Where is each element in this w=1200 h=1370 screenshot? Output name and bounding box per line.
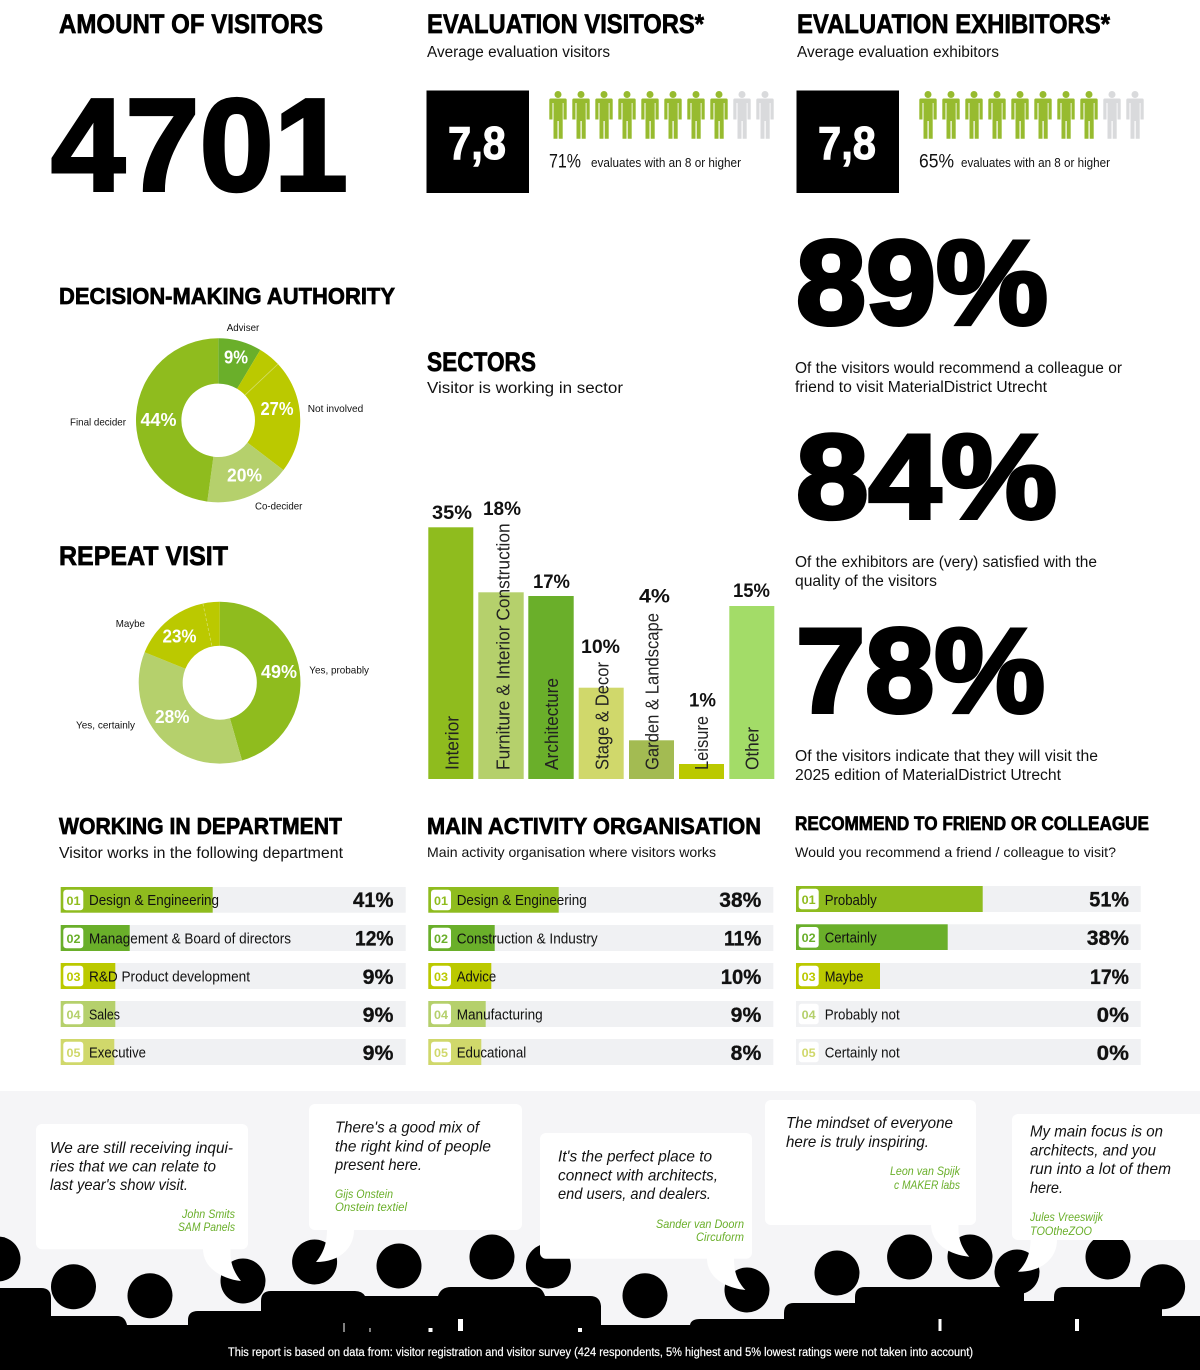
icon row: people rating visitors bbox=[549, 91, 774, 139]
stat: 65 percent of exhibitors: evaluates with an 8 or higher bbox=[961, 156, 1110, 170]
row: probably not: 0% bbox=[1097, 1004, 1129, 1027]
row: certainly not bbox=[796, 1039, 1141, 1065]
row: management: Management & Board of directors bbox=[89, 930, 291, 947]
bar chart: sectors: 1% bbox=[689, 690, 716, 712]
donut chart: decision-making authority bbox=[136, 338, 300, 502]
speech bubble: Sander van Doorn: Circuform bbox=[696, 1230, 744, 1244]
row: executive: Executive bbox=[89, 1045, 146, 1062]
speech bubble: Gijs Onstein: the right kind of people bbox=[335, 1138, 491, 1156]
labels: repeat visit categories: Yes, probably bbox=[309, 664, 370, 676]
stat: 89 percent recommend: friend to visit MaterialDistrict Utrecht bbox=[795, 379, 1048, 396]
row: educational: Educational bbox=[457, 1045, 526, 1062]
donut chart: decision-making authority: 9% bbox=[224, 348, 248, 368]
stat: 84 percent satisfied: Of the exhibitors are (very) satisfied with the bbox=[795, 554, 1097, 571]
row: design and engineering: Design & Engineering bbox=[457, 892, 587, 909]
speech bubble: Leon van Spijk: c MAKER labs bbox=[894, 1178, 960, 1192]
donut chart: decision-making authority: 44% bbox=[140, 410, 176, 430]
row: sales: 04 bbox=[66, 1008, 81, 1022]
stat: 89 percent recommend: 89% bbox=[796, 216, 1048, 350]
row: certainly not: Certainly not bbox=[825, 1045, 900, 1062]
labels: repeat visit categories bbox=[76, 618, 370, 732]
speech bubble: John Smits: John Smits bbox=[181, 1207, 235, 1221]
stat: 78 percent will visit 2025: 78% bbox=[796, 604, 1045, 738]
panel: recommend to friend or colleague bbox=[795, 814, 1149, 1065]
bar chart: sectors: Stage & Decor bbox=[593, 662, 613, 770]
speech bubble: Leon van Spijk: here is truly inspiring. bbox=[786, 1134, 929, 1151]
panel: amount of visitors bbox=[51, 9, 348, 218]
subtitle: average evaluation visitors: Average evaluation visitors bbox=[427, 44, 610, 61]
row: sales bbox=[61, 1001, 406, 1027]
heading: sectors: SECTORS bbox=[427, 347, 536, 377]
labels: repeat visit categories: Maybe bbox=[116, 618, 145, 630]
icon row: people rating exhibitors bbox=[919, 91, 1144, 139]
stat: 89 percent recommend bbox=[795, 216, 1122, 396]
stat: 71 percent of visitors: evaluates with an 8 or higher bbox=[591, 156, 741, 170]
speech bubble: Gijs Onstein bbox=[309, 1104, 522, 1262]
panel: decision-making authority bbox=[59, 283, 395, 512]
stat: 65 percent of exhibitors: 65% bbox=[919, 152, 954, 172]
row: probably not: 04 bbox=[802, 1008, 816, 1022]
donut chart: repeat visit: 28% bbox=[155, 707, 190, 727]
row: design and engineering: 41% bbox=[353, 889, 394, 912]
speech bubble: Sander van Doorn: end users, and dealers. bbox=[558, 1186, 711, 1203]
row: probably not: Probably not bbox=[825, 1006, 900, 1023]
stat: 84 percent satisfied: 84% bbox=[796, 410, 1057, 544]
heading: repeat visit: REPEAT VISIT bbox=[59, 541, 228, 571]
row: R and D: 03 bbox=[66, 970, 81, 984]
speech bubble: Jules Vreeswijk: here. bbox=[1030, 1180, 1063, 1197]
labels: decision-making categories bbox=[70, 322, 363, 512]
labels: repeat visit categories: Yes, certainly bbox=[76, 720, 136, 732]
speech bubble: John Smits: ries that we can relate to bbox=[50, 1158, 216, 1176]
stat: 84 percent satisfied: quality of the visitors bbox=[795, 573, 937, 590]
panel: main activity organisation bbox=[427, 813, 773, 1065]
row: management: 02 bbox=[66, 932, 81, 946]
speech bubble: Jules Vreeswijk: My main focus is on bbox=[1030, 1124, 1163, 1140]
stat: 78 percent will visit 2025: Of the visitors indicate that they will visit the bbox=[795, 748, 1098, 765]
bar chart: sectors: 17% bbox=[533, 572, 570, 593]
row: probably: 51% bbox=[1089, 888, 1129, 912]
bar chart: sectors bbox=[428, 499, 774, 779]
speech bubble: Leon van Spijk: Leon van Spijk bbox=[890, 1164, 961, 1178]
labels: decision-making categories: Adviser bbox=[227, 322, 260, 334]
row: executive bbox=[61, 1039, 406, 1065]
stat: 78 percent will visit 2025: 2025 edition of MaterialDistrict Utrecht bbox=[795, 767, 1062, 784]
bar chart: sectors: 18% bbox=[483, 499, 521, 520]
row: executive: 9% bbox=[363, 1042, 394, 1065]
heading: evaluation visitors: EVALUATION VISITORS* bbox=[427, 9, 704, 39]
speech bubble: Leon van Spijk bbox=[765, 1100, 976, 1257]
row: design and engineering bbox=[428, 887, 773, 913]
row: educational: 8% bbox=[731, 1042, 762, 1065]
panel: testimonials band bbox=[0, 1091, 1200, 1370]
donut chart: decision-making authority: 20% bbox=[227, 466, 262, 486]
row: management bbox=[61, 925, 406, 951]
row: advice bbox=[428, 963, 773, 989]
stat: 65 percent of exhibitors bbox=[919, 152, 1110, 172]
subtitle: department: Visitor works in the following department bbox=[59, 845, 344, 862]
row: certainly: 38% bbox=[1087, 927, 1129, 950]
stat: 89 percent recommend: Of the visitors would recommend a colleague or bbox=[795, 360, 1122, 377]
row: certainly not: 0% bbox=[1097, 1042, 1129, 1065]
footer note: This report is based on data from: visitor registration and visitor survey (424 respondents, 5% highest and 5% lowest ratings were not taken into account) bbox=[228, 1347, 973, 1359]
labels: decision-making categories: Final decider bbox=[70, 416, 126, 428]
row: design and engineering: Design & Engineering bbox=[89, 892, 219, 909]
speech bubble: John Smits: SAM Panels bbox=[178, 1220, 235, 1234]
row: construction and industry: 02 bbox=[434, 932, 448, 946]
stat: 71 percent of visitors: 71% bbox=[549, 152, 581, 172]
row: advice: 10% bbox=[721, 966, 762, 989]
bar chart: sectors: 4% bbox=[639, 586, 670, 608]
row: advice: Advice bbox=[457, 969, 496, 986]
score box: exhibitors 7,8: 7,8 bbox=[818, 117, 876, 169]
row: maybe: Maybe bbox=[825, 968, 863, 986]
speech bubble: Gijs Onstein: Onstein textiel bbox=[335, 1200, 407, 1214]
donut chart: repeat visit bbox=[139, 602, 300, 764]
heading: evaluation exhibitors: EVALUATION EXHIBITORS* bbox=[797, 9, 1110, 39]
heading: decision-making authority: DECISION-MAKING AUTHORITY bbox=[59, 283, 395, 309]
row: R and D: 9% bbox=[363, 966, 394, 989]
heading: working in department: WORKING IN DEPARTMENT bbox=[59, 813, 342, 839]
donut chart: decision-making authority: 27% bbox=[260, 399, 294, 419]
labels: decision-making categories: Co-decider bbox=[255, 500, 303, 512]
panel: working in department bbox=[59, 813, 406, 1065]
speech bubble: Leon van Spijk: The mindset of everyone bbox=[786, 1115, 953, 1132]
heading: amount of visitors: AMOUNT OF VISITORS bbox=[59, 9, 323, 39]
row: certainly bbox=[796, 924, 1141, 950]
speech bubble: Gijs Onstein: There's a good mix of bbox=[335, 1120, 480, 1136]
panel: sectors bbox=[427, 347, 774, 779]
row: manufacturing bbox=[428, 1001, 773, 1027]
row: construction and industry: Construction & Industry bbox=[457, 930, 598, 947]
heading: main activity organisation: MAIN ACTIVITY ORGANISATION bbox=[427, 813, 761, 839]
score box: exhibitors 7,8 bbox=[796, 90, 899, 193]
stat: 84 percent satisfied bbox=[795, 410, 1097, 590]
subtitle: main activity: Main activity organisation where visitors works bbox=[427, 844, 716, 860]
row: probably bbox=[796, 886, 1141, 912]
subtitle: visitor sector: Visitor is working in sector bbox=[427, 380, 623, 397]
row: maybe: 03 bbox=[802, 970, 816, 984]
bar chart: sectors: Furniture & Interior Construction bbox=[493, 523, 513, 770]
speech bubble: John Smits: last year's show visit. bbox=[50, 1177, 188, 1194]
stat: 71 percent of visitors bbox=[549, 152, 741, 172]
row: educational: 05 bbox=[434, 1046, 448, 1060]
subtitle: average evaluation exhibitors: Average evaluation exhibitors bbox=[797, 44, 999, 61]
heading: recommend to friend or colleague: RECOMMEND TO FRIEND OR COLLEAGUE bbox=[795, 814, 1149, 835]
bar chart: sectors: 35% bbox=[432, 503, 472, 524]
bar chart: sectors: Garden & Landscape bbox=[643, 613, 663, 770]
row: sales: 9% bbox=[363, 1004, 394, 1027]
row: certainly: Certainly bbox=[825, 930, 877, 946]
row: executive: 05 bbox=[66, 1046, 81, 1060]
row: construction and industry bbox=[428, 925, 773, 951]
row: R and D bbox=[61, 963, 406, 989]
stat: 78 percent will visit 2025 bbox=[795, 604, 1098, 784]
row: advice: 03 bbox=[434, 970, 448, 984]
speech bubble: Gijs Onstein: Gijs Onstein bbox=[335, 1187, 393, 1201]
bar chart: sectors: Other bbox=[743, 727, 763, 770]
bar chart: sectors: 15% bbox=[733, 581, 770, 602]
row: probably not bbox=[796, 1001, 1141, 1027]
bar chart: sectors: Architecture bbox=[542, 678, 562, 770]
speech bubble: Sander van Doorn: Sander van Doorn bbox=[656, 1217, 744, 1231]
row: R and D: R&D Product development bbox=[89, 969, 251, 986]
speech bubble: John Smits: We are still receiving inqui- bbox=[50, 1140, 233, 1157]
speech bubble: Jules Vreeswijk: architects, and you bbox=[1030, 1142, 1156, 1160]
donut chart: repeat visit: 23% bbox=[162, 626, 196, 646]
speech bubble: Gijs Onstein: present here. bbox=[334, 1157, 422, 1174]
speech bubble: Sander van Doorn: It's the perfect place to bbox=[558, 1148, 712, 1166]
row: probably: Probably bbox=[825, 892, 877, 909]
row: sales: Sales bbox=[89, 1006, 120, 1023]
row: certainly: 02 bbox=[802, 931, 816, 945]
speech bubble: Sander van Doorn: connect with architects, bbox=[558, 1168, 718, 1184]
row: design and engineering bbox=[61, 887, 406, 913]
row: educational bbox=[428, 1039, 773, 1065]
speech bubble: Jules Vreeswijk: run into a lot of them bbox=[1030, 1161, 1171, 1178]
speech bubble: Jules Vreeswijk bbox=[1012, 1114, 1200, 1272]
speech bubble: Sander van Doorn bbox=[540, 1133, 752, 1290]
row: certainly not: 05 bbox=[802, 1046, 816, 1060]
row: manufacturing: 9% bbox=[731, 1004, 762, 1027]
speech bubble: Jules Vreeswijk: Jules Vreeswijk bbox=[1029, 1210, 1104, 1224]
row: management: 12% bbox=[355, 928, 394, 950]
score box: visitors 7,8: 7,8 bbox=[448, 117, 506, 169]
speech bubble: Jules Vreeswijk: TOOtheZOO bbox=[1030, 1224, 1092, 1238]
illustration: audience silhouettes bbox=[0, 1234, 1200, 1370]
bar chart: sectors: 10% bbox=[581, 637, 620, 658]
row: construction and industry: 11% bbox=[724, 928, 762, 950]
donut chart: repeat visit: 49% bbox=[261, 662, 297, 682]
labels: decision-making categories: Not involved bbox=[308, 403, 363, 415]
row: maybe bbox=[796, 963, 1141, 989]
speech bubble: John Smits bbox=[36, 1124, 248, 1281]
subtitle: recommend question: Would you recommend a friend / colleague to visit? bbox=[795, 844, 1116, 860]
number: 4701 visitors: 4701 bbox=[51, 72, 348, 218]
row: design and engineering: 01 bbox=[66, 894, 81, 908]
bar chart: sectors: Leisure bbox=[692, 716, 712, 770]
bar chart: sectors: Interior bbox=[442, 716, 462, 770]
panel: repeat visit bbox=[59, 541, 370, 764]
row: manufacturing: 04 bbox=[434, 1008, 448, 1022]
row: manufacturing: Manufacturing bbox=[457, 1006, 543, 1023]
panel: evaluation visitors bbox=[426, 9, 774, 193]
row: probably: 01 bbox=[802, 893, 816, 907]
row: design and engineering: 01 bbox=[434, 894, 448, 908]
row: design and engineering: 38% bbox=[719, 889, 762, 912]
score box: visitors 7,8 bbox=[426, 90, 529, 193]
panel: evaluation exhibitors bbox=[796, 9, 1144, 193]
row: maybe: 17% bbox=[1090, 966, 1129, 989]
